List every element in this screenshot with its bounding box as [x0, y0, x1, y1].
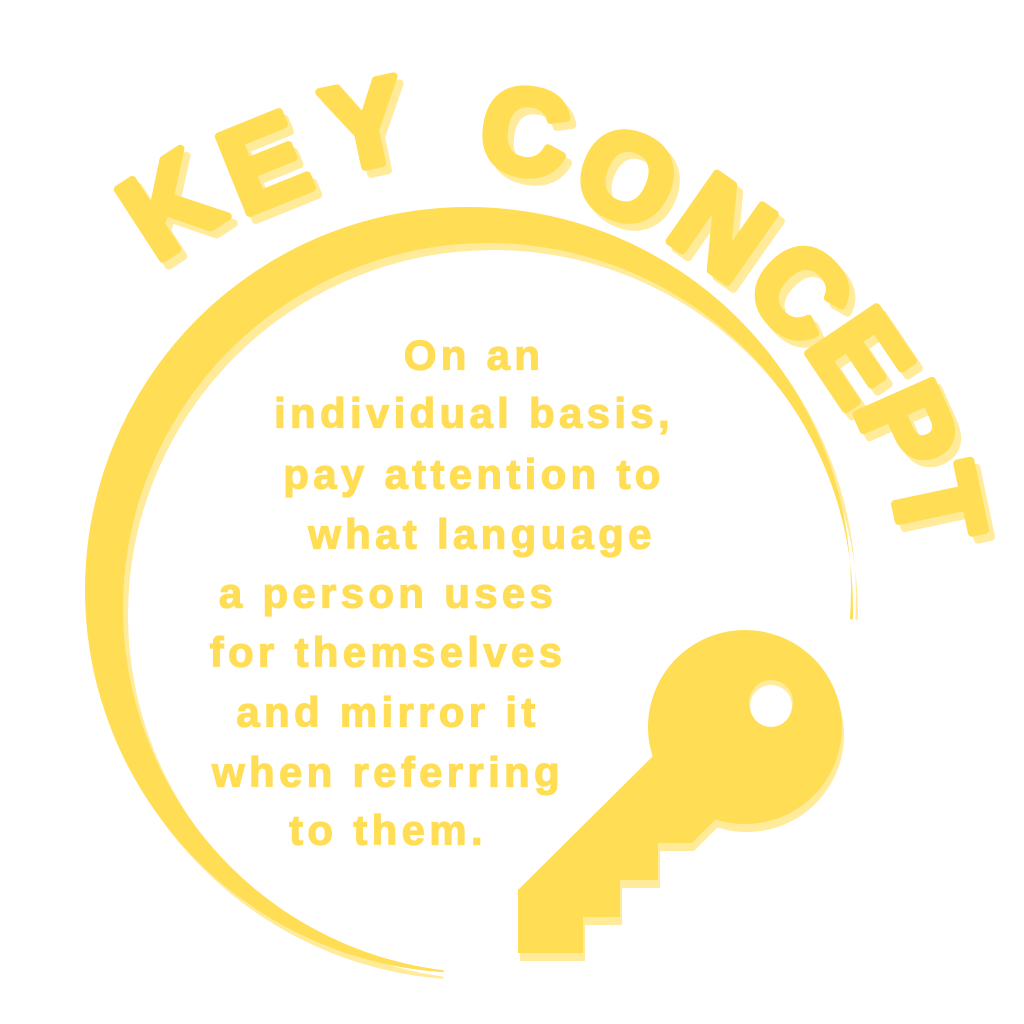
- title: KEY CONCEPT: E: [208, 93, 332, 247]
- body text: what language: [307, 510, 656, 558]
- title: KEY CONCEPT: C: [722, 214, 878, 370]
- arc: crescent ring: [85, 207, 858, 980]
- title: KEY CONCEPT: C: [473, 60, 577, 204]
- body text: to them.: [289, 806, 487, 854]
- body text: On an: [404, 332, 544, 378]
- title: KEY CONCEPT: C: [479, 67, 583, 211]
- body text: for themselves: [210, 628, 566, 676]
- title: KEY CONCEPT: [97, 51, 1016, 561]
- title: KEY CONCEPT: T: [864, 454, 1010, 554]
- title: KEY CONCEPT: E: [782, 286, 938, 428]
- body text: individual basis,: [274, 390, 674, 436]
- title: KEY CONCEPT: O: [559, 97, 695, 257]
- title: KEY CONCEPT: P: [836, 370, 990, 498]
- title: KEY CONCEPT: Y: [312, 51, 418, 199]
- title: KEY CONCEPT: N: [648, 148, 796, 308]
- title: KEY CONCEPT: Y: [318, 58, 424, 206]
- body text: and mirror it: [236, 688, 540, 736]
- title: KEY CONCEPT: E: [788, 293, 944, 435]
- title: KEY CONCEPT: N: [654, 155, 802, 315]
- body text: when referring: [211, 748, 564, 796]
- title: KEY CONCEPT: T: [870, 461, 1016, 561]
- title: KEY CONCEPT: K: [103, 132, 249, 292]
- title: KEY CONCEPT: C: [728, 221, 884, 377]
- title: KEY CONCEPT: O: [565, 104, 701, 264]
- body text: pay attention to: [283, 450, 665, 498]
- body text: a person uses: [219, 570, 557, 616]
- title: KEY CONCEPT: K: [97, 125, 243, 285]
- title: KEY CONCEPT: E: [202, 86, 326, 240]
- title: KEY CONCEPT: P: [830, 363, 984, 491]
- body text: [210, 332, 674, 854]
- icon: key: [518, 630, 844, 961]
